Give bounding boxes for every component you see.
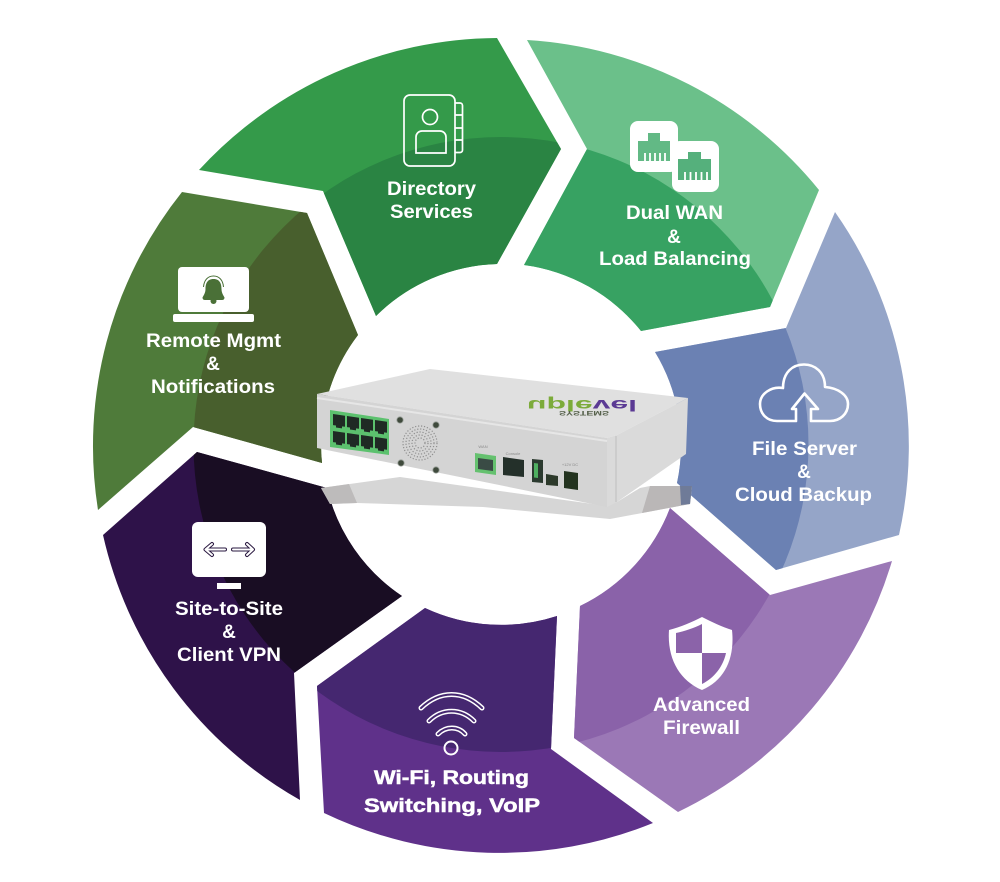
label: Directory Services bbox=[387, 179, 476, 223]
speaker grille bbox=[403, 426, 437, 460]
label: Site-to-Site and Client VPN: Client VPN bbox=[177, 645, 281, 666]
label: Wi-Fi, Routing, Switching, VoIP bbox=[364, 767, 540, 817]
screws bbox=[397, 417, 439, 473]
port cluster bbox=[475, 444, 578, 490]
label: File Server and Cloud Backup bbox=[735, 439, 872, 506]
label: Directory Services: Services bbox=[390, 202, 473, 223]
infographic: feature wheel bbox=[92, 38, 909, 853]
label: Site-to-Site and Client VPN bbox=[175, 599, 283, 666]
label: Advanced Firewall: Firewall bbox=[663, 718, 740, 739]
icon: shield bbox=[669, 617, 733, 690]
panel: Advanced Firewall bbox=[574, 508, 892, 812]
label: Dual WAN and Load Balancing: Dual WAN bbox=[626, 203, 723, 224]
panel: Site-to-Site and Client VPN bbox=[103, 452, 402, 800]
label: File Server and Cloud Backup: Cloud Backup bbox=[735, 485, 872, 506]
label: Site-to-Site and Client VPN: & bbox=[222, 622, 236, 643]
panel: Directory Services bbox=[199, 38, 561, 316]
label: Remote Mgmt and Notifications: Remote Mgmt bbox=[146, 331, 282, 352]
device top face bbox=[317, 369, 688, 438]
device shadow bbox=[321, 477, 692, 519]
label: Wi-Fi, Routing, Switching, VoIP: Switching, VoIP bbox=[364, 795, 540, 817]
panel: Dual WAN and Load Balancing bbox=[524, 40, 819, 331]
icon: laptop with bell bbox=[173, 267, 254, 322]
port cluster: WAN bbox=[478, 444, 488, 449]
label: File Server and Cloud Backup: & bbox=[797, 462, 811, 483]
label: Dual WAN and Load Balancing bbox=[599, 203, 751, 270]
label: Remote Mgmt and Notifications bbox=[146, 331, 282, 398]
logo: uplevel systems: uple vel bbox=[527, 396, 637, 413]
label: Advanced Firewall: Advanced bbox=[653, 695, 750, 716]
icon: cloud upload bbox=[760, 364, 848, 421]
label: Dual WAN and Load Balancing: Load Balancing bbox=[599, 249, 751, 270]
label: Dual WAN and Load Balancing: & bbox=[667, 227, 681, 248]
device front face bbox=[317, 394, 607, 507]
label: File Server and Cloud Backup: File Server bbox=[752, 439, 858, 460]
label: Remote Mgmt and Notifications: & bbox=[206, 354, 220, 375]
panel: File Server and Cloud Backup bbox=[655, 212, 909, 570]
label: Wi-Fi, Routing, Switching, VoIP: Wi-Fi, Routing bbox=[374, 767, 529, 789]
panel: eight green ethernet ports bbox=[330, 410, 389, 455]
device: Uplevel Systems router bbox=[317, 369, 692, 519]
port cluster: Console bbox=[506, 451, 521, 456]
label: Advanced Firewall bbox=[653, 695, 750, 739]
panel: Wi-Fi, Routing, Switching, VoIP bbox=[317, 608, 653, 853]
label: Directory Services: Directory bbox=[387, 179, 476, 200]
device side face bbox=[607, 398, 688, 507]
label: Site-to-Site and Client VPN: Site-to-Site bbox=[175, 599, 283, 620]
icon: wifi bbox=[421, 694, 482, 754]
icon: monitor with arrows bbox=[192, 522, 266, 589]
icon: two ethernet ports bbox=[630, 121, 719, 192]
panel: Remote Mgmt and Notifications bbox=[93, 192, 358, 510]
label: Remote Mgmt and Notifications: Notifications bbox=[151, 377, 275, 398]
logo: uplevel systems: SYSTEMS bbox=[559, 409, 609, 415]
icon: address book bbox=[404, 95, 462, 166]
port cluster: +12V DC bbox=[562, 462, 578, 467]
